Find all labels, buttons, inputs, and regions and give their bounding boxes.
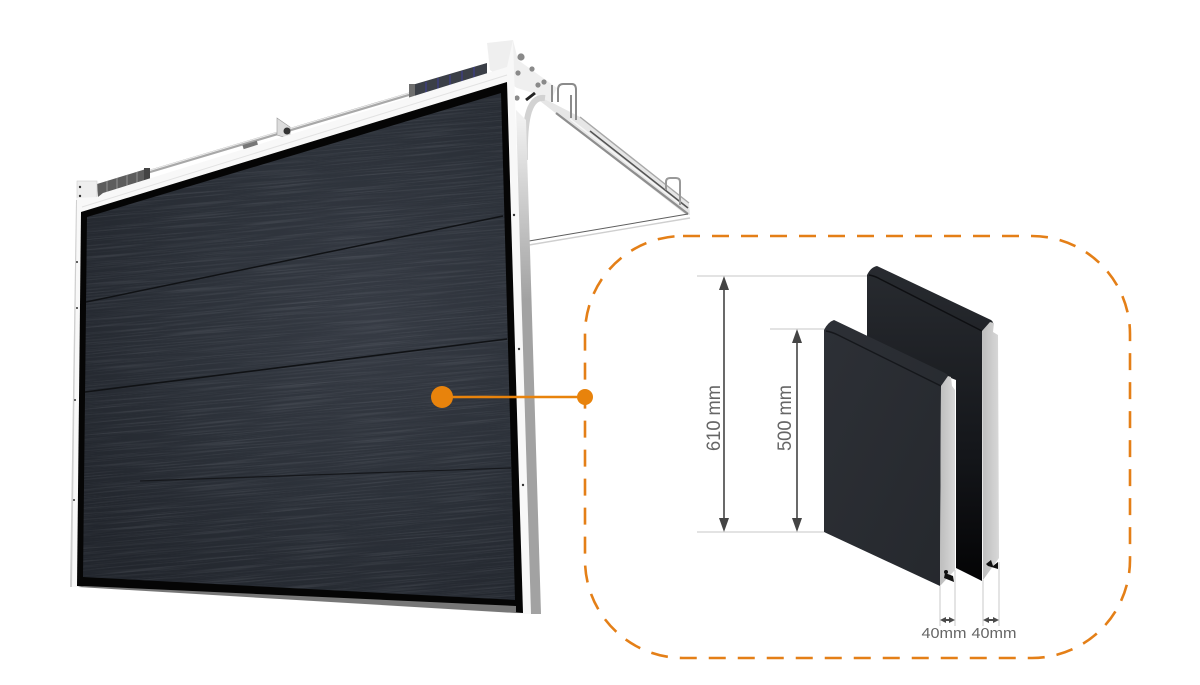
40mm width marks: 40mm (922, 626, 966, 642)
40mm width marks: 40mm (972, 626, 1016, 642)
garage door (70, 40, 690, 614)
infographic canvas (70, 40, 1132, 660)
610 mm dimension (704, 276, 729, 532)
top frame shadow (82, 75, 507, 207)
torsion rod and springs (77, 63, 487, 201)
bottom grey strip (78, 586, 516, 613)
door panel surface (83, 93, 515, 600)
610 mm dimension: 610 mm (704, 385, 725, 451)
panel seams (85, 216, 511, 481)
frame fixing dots (73, 214, 524, 501)
610 mm panel (867, 266, 999, 581)
wood grain texture (83, 98, 515, 599)
left frame edge (70, 200, 77, 587)
right post side (516, 110, 541, 614)
500 mm panel (824, 320, 955, 586)
dimension guide lines (697, 276, 999, 626)
door frame (70, 40, 531, 614)
connector from door to callout (431, 386, 593, 408)
overhead track and bracket (487, 40, 690, 215)
500 mm dimension: 500 mm (775, 385, 796, 451)
cable line (529, 214, 690, 245)
40mm width marks (922, 617, 1016, 642)
500 mm dimension (775, 329, 802, 532)
black seal (77, 82, 523, 613)
dashed callout frame (585, 236, 1130, 658)
